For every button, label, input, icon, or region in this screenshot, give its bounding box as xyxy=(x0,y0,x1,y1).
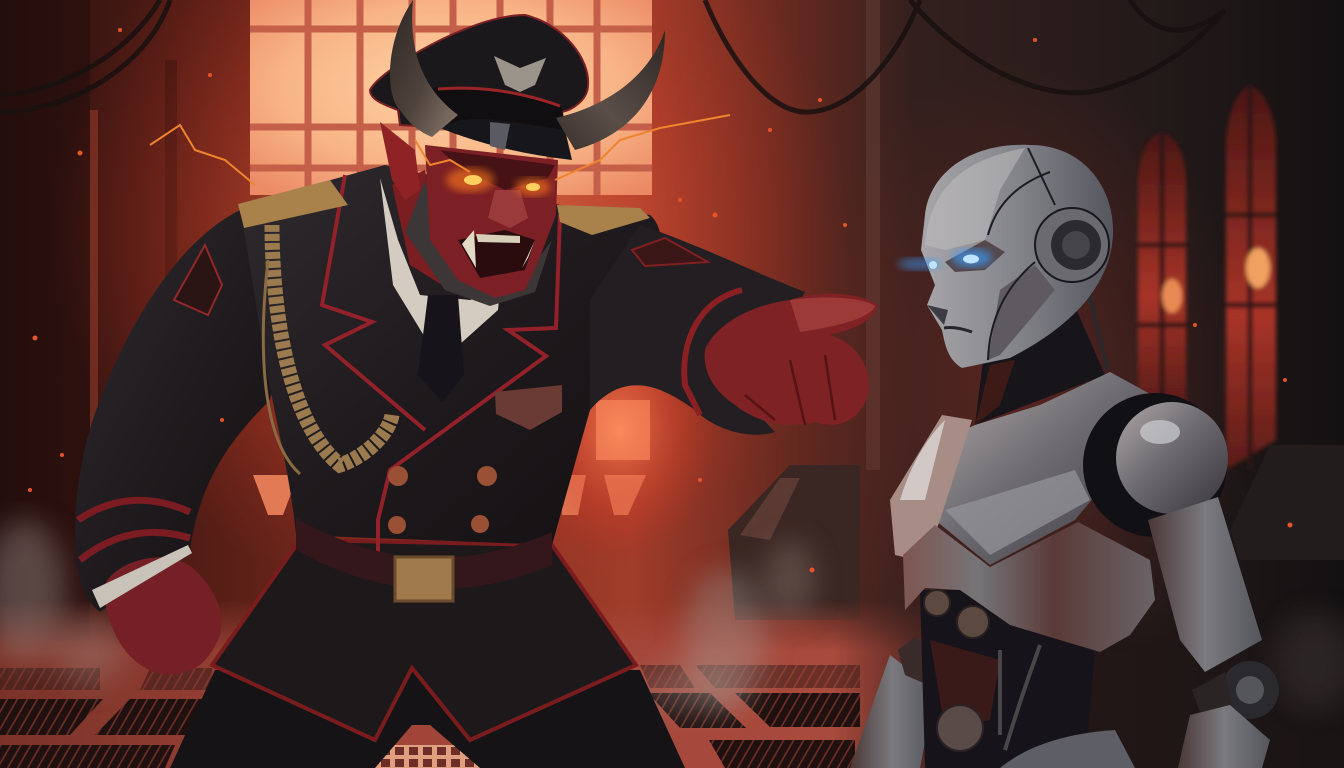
main glowing window xyxy=(50,0,850,610)
glowing eyes xyxy=(446,168,551,196)
right elbow xyxy=(1221,661,1279,719)
lightning sparks xyxy=(150,115,730,185)
head seams xyxy=(988,148,1055,360)
shoulder patches xyxy=(174,245,222,315)
shoulder joint xyxy=(1083,393,1227,537)
eye socket xyxy=(945,240,1005,272)
glowing blue eyes xyxy=(898,249,992,270)
neck xyxy=(975,295,1105,425)
neck xyxy=(392,170,450,290)
abdomen mechanics xyxy=(920,590,1100,768)
nose xyxy=(488,190,528,228)
beard xyxy=(405,180,552,306)
left horn xyxy=(390,0,458,137)
consoles xyxy=(728,445,1344,620)
forehead highlight xyxy=(925,148,1025,250)
cap band xyxy=(430,87,566,135)
torso armour xyxy=(935,372,1165,565)
cheek plate xyxy=(988,265,1055,360)
pelvis plate xyxy=(1000,730,1135,768)
right forearm xyxy=(1178,705,1270,768)
ear xyxy=(380,122,420,200)
coat skirt xyxy=(212,540,636,740)
medals xyxy=(495,385,562,430)
belt and buckle xyxy=(296,518,552,589)
left elbow joint xyxy=(898,637,935,688)
head xyxy=(921,145,1113,368)
cap badge xyxy=(494,56,546,92)
right horn xyxy=(556,30,665,150)
left arm xyxy=(850,655,935,768)
headphone disc xyxy=(1035,208,1109,282)
left arm xyxy=(75,210,300,612)
cap visor xyxy=(440,119,572,160)
buttons xyxy=(388,466,497,534)
demon officer xyxy=(75,0,877,768)
brow shadow xyxy=(440,150,555,190)
shirt and tie xyxy=(380,178,500,362)
pointing hand xyxy=(705,294,877,425)
aiguillette rope xyxy=(272,225,392,465)
abdomen disc xyxy=(937,705,983,751)
lapels xyxy=(322,175,560,555)
smoke xyxy=(0,520,1344,715)
right arched windows xyxy=(1138,85,1276,470)
officer cap crown xyxy=(370,15,588,135)
pointing arm xyxy=(590,225,805,435)
hanging cables xyxy=(0,0,1225,112)
robot xyxy=(850,145,1279,768)
floor grating xyxy=(0,604,1117,768)
right arm xyxy=(1148,497,1262,672)
mouth with fangs xyxy=(458,230,535,278)
left cuff stripes xyxy=(78,500,190,560)
clenched fist xyxy=(103,557,221,675)
torso xyxy=(240,165,662,545)
legs xyxy=(170,670,685,768)
epaulettes xyxy=(238,180,348,228)
embers xyxy=(28,28,1292,608)
face xyxy=(425,145,558,298)
